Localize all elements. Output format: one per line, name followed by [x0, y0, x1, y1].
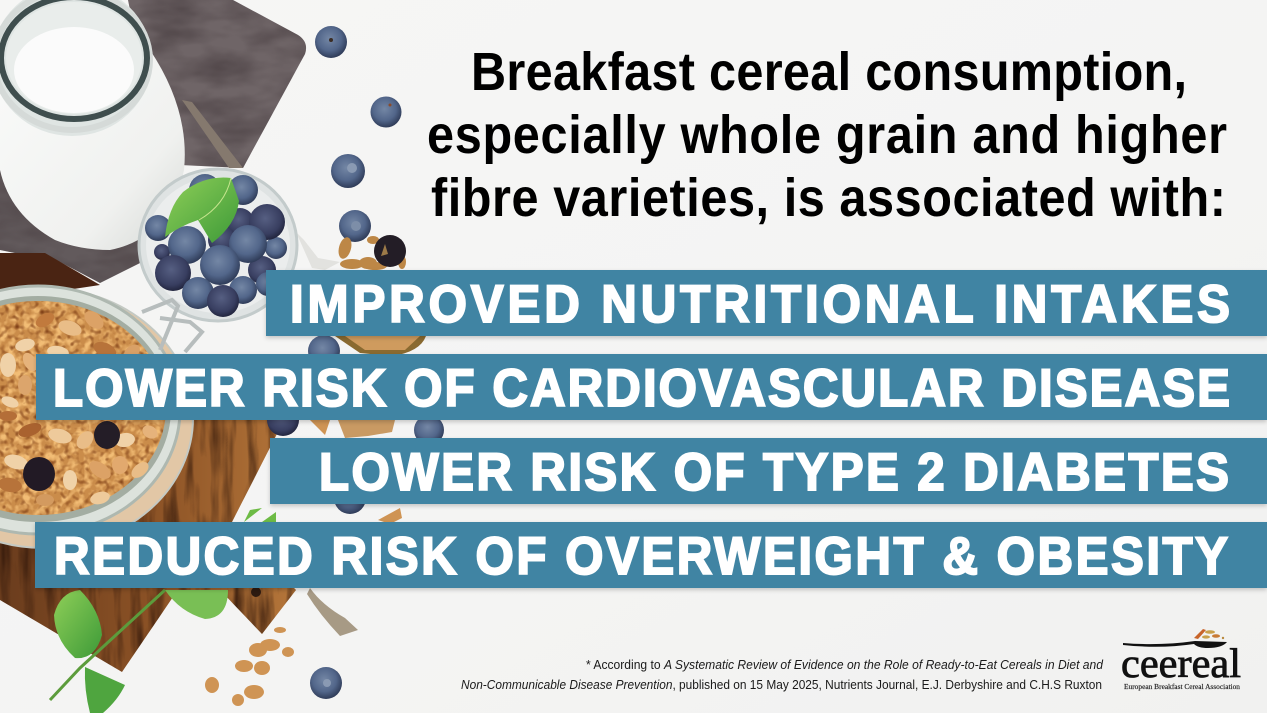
- tagline: European Breakfast Cereal Association: [1124, 682, 1240, 691]
- mint sprig: [50, 508, 276, 713]
- loose blueberries: [267, 26, 444, 699]
- glass bowl of blueberries: [139, 169, 297, 321]
- footnote: * According to A Systematic Review of Evidence on the Role of Ready-to-Eat Cereals in Diet and: [586, 658, 1104, 672]
- banner: improved nutritional intakes: IMPROVED NUTRITIONAL INTAKES: [290, 274, 1230, 333]
- milk jar: [0, 0, 185, 250]
- footnote: [461, 658, 1104, 692]
- jar of granola: [0, 286, 202, 548]
- granola cluster with raisin: [336, 235, 420, 350]
- footnote: Non-Communicable Disease Prevention, published on 15 May 2025, Nutrients Journal, E.J. Derbyshire and C.H.S Ruxton: [461, 678, 1102, 692]
- banner: lower risk of type 2 diabetes: LOWER RISK OF TYPE 2 DIABETES: [319, 442, 1229, 501]
- title: fibre varieties, is associated with:: [431, 167, 1226, 228]
- rope: [307, 588, 358, 636]
- granola flakes: [0, 308, 160, 506]
- icon: spoon with grains: [1123, 629, 1227, 648]
- title: especially whole grain and higher: [427, 104, 1227, 165]
- banner: lower risk of cardiovascular disease: LOWER RISK OF CARDIOVASCULAR DISEASE: [53, 358, 1230, 417]
- title: [427, 41, 1227, 228]
- mint leaf: [165, 178, 239, 243]
- title: Breakfast cereal consumption,: [471, 41, 1187, 102]
- logo: ceereal: [1121, 629, 1241, 691]
- silver spoon: [182, 100, 426, 356]
- wooden cutting board: [0, 253, 296, 672]
- wordmark: ceereal: [1121, 640, 1241, 686]
- grey linen napkin: [0, 0, 306, 283]
- scattered granola crumbs: [205, 420, 402, 706]
- banner: reduced risk of overweight and obesity: REDUCED RISK OF OVERWEIGHT & OBESITY: [54, 526, 1228, 585]
- bowl berries: [145, 174, 287, 317]
- raisins: [94, 421, 120, 449]
- jar clasp: [142, 300, 202, 352]
